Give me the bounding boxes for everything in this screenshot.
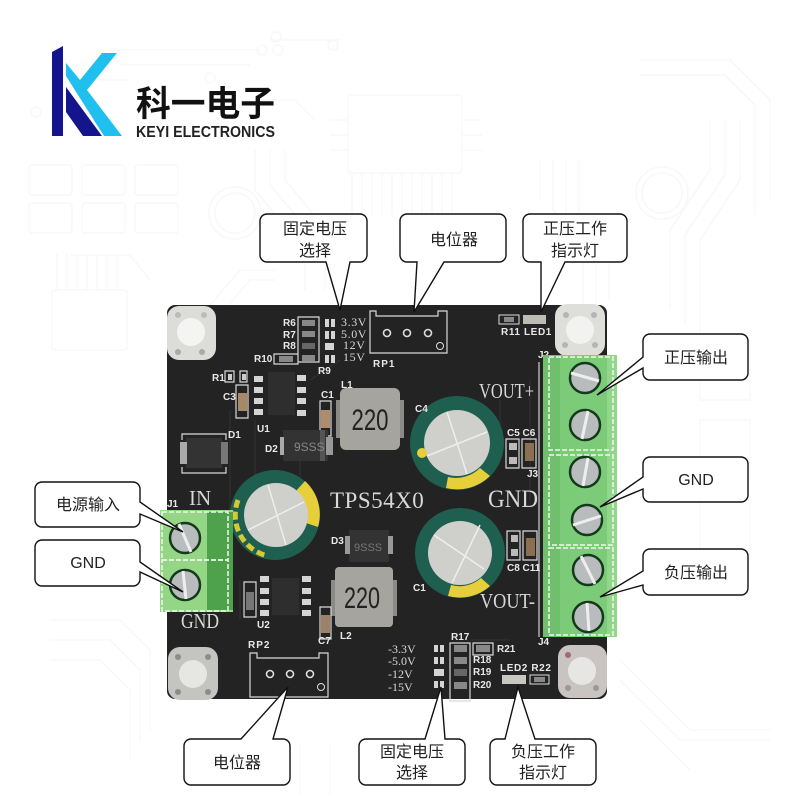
callout: fixed voltage select bottom: 选择: [396, 764, 428, 782]
silk label IN: IN: [189, 486, 211, 510]
silk label VOUT+: VOUT+: [479, 379, 534, 403]
capacitor C7 and C9: C7: [318, 636, 331, 647]
negative voltage selector resistors: R20: [473, 680, 492, 691]
diode D3: D3: [331, 536, 344, 547]
electrolytic capacitor C4: C4: [415, 404, 428, 415]
R1 C3 components: R1: [212, 373, 225, 384]
callout: fixed voltage select top: 选择: [299, 242, 331, 260]
board name: TPS54X0: [330, 488, 424, 513]
inductor L1: L1: [341, 380, 353, 391]
callout: negative output: 负压输出: [664, 564, 728, 582]
diode D1: [180, 430, 241, 473]
LED1 and R11: [499, 315, 552, 338]
callout: negative working indicator: [490, 687, 596, 785]
callout: GND left: [35, 540, 183, 592]
positive voltage labels: 3.3V: [341, 315, 367, 329]
R1 C3 components: [212, 371, 248, 418]
callout: potentiometer top: [400, 214, 506, 312]
positive voltage labels: [341, 315, 367, 364]
connector labels J1 J2 J3 J4: J1: [167, 499, 179, 510]
logo: Keyi Electronics: [52, 46, 275, 141]
negative voltage selector resistors: R21: [497, 644, 516, 655]
diode D2: [265, 430, 333, 461]
positive voltage labels: 12V: [343, 338, 365, 352]
mounting hole bottom right: [558, 645, 607, 698]
callout: positive working indicator: 指示灯: [551, 242, 599, 260]
positive voltage selector resistors: R7: [283, 330, 296, 341]
negative voltage labels: -3.3V: [388, 642, 416, 656]
connector labels J1 J2 J3 J4: J3: [527, 469, 539, 480]
callout: power input: [35, 482, 183, 532]
callout: positive output: [597, 334, 748, 395]
negative voltage selector resistors: R18: [473, 655, 492, 666]
negative voltage selector resistors: R17: [451, 632, 470, 643]
callout: potentiometer bottom: [184, 687, 290, 785]
negative voltage labels: [388, 642, 416, 694]
diode D2: 9SSS: [294, 440, 325, 454]
IC U2: U2: [257, 620, 270, 631]
callout: power input: 电源输入: [56, 496, 120, 514]
connector labels J1 J2 J3 J4: J4: [538, 637, 550, 648]
brand name Chinese: 科一电子: [136, 85, 275, 124]
PCB base: [167, 305, 607, 699]
callout: GND right: GND: [678, 472, 714, 489]
circuit board photo: [160, 304, 617, 701]
electrolytic capacitor C4: [410, 396, 504, 490]
mounting hole top right: [555, 304, 605, 356]
small capacitors C8 C11: [507, 531, 541, 574]
diode D3: [331, 530, 393, 562]
positive voltage selector resistors: R8: [283, 341, 296, 352]
inductor L2: 220: [344, 582, 380, 615]
icon: K mark: [52, 46, 122, 136]
LED2 and R22: [500, 663, 552, 684]
capacitor C7 and C9: [244, 582, 331, 647]
mounting hole bottom left: [168, 647, 218, 700]
callout: negative working indicator: 负压工作: [511, 743, 575, 761]
capacitor C1 small: [320, 390, 334, 436]
screws left: [170, 523, 200, 600]
positive voltage selector resistors: R10: [254, 354, 273, 365]
negative voltage selector resistors: [434, 632, 516, 701]
brand name English: KEYI ELECTRONICS: [136, 124, 275, 141]
silk label VOUT-: VOUT-: [480, 589, 535, 613]
small capacitors C5 C6: C5 C6: [507, 428, 536, 439]
callout: positive working indicator: 正压工作: [543, 220, 607, 238]
diode D2: D2: [265, 444, 278, 455]
electrolytic capacitor left: [230, 470, 320, 560]
callout: potentiometer bottom: 电位器: [213, 754, 261, 772]
electrolytic capacitor C1: [413, 508, 505, 598]
callout: GND left: GND: [70, 555, 106, 572]
potentiometer header RP1: RP1: [373, 359, 395, 370]
silk label GND right: GND: [488, 486, 538, 513]
connector labels J1 J2 J3 J4: J2: [538, 350, 550, 361]
potentiometer header RP2: RP2: [248, 640, 270, 651]
green terminal block right: [539, 355, 617, 637]
callout: fixed voltage select bottom: 固定电压: [380, 743, 444, 761]
callout: positive working indicator: [523, 214, 627, 312]
callout: fixed voltage select top: 固定电压: [283, 220, 347, 238]
IC U2: [257, 576, 311, 631]
callout: fixed voltage select bottom: [359, 687, 465, 785]
negative voltage labels: -5.0V: [388, 654, 416, 668]
callout: positive output: 正压输出: [664, 349, 728, 367]
negative voltage selector resistors: R19: [473, 667, 492, 678]
callout: fixed voltage select top: [260, 214, 367, 310]
positive voltage selector resistors: R9: [318, 366, 331, 377]
positive voltage selector resistors: [254, 317, 335, 377]
negative voltage labels: -12V: [388, 667, 413, 681]
positive voltage selector resistors: R6: [283, 318, 296, 329]
inductor L1: 220: [352, 404, 388, 437]
screws right: [570, 363, 603, 632]
silk label GND left: GND: [181, 609, 219, 633]
electrolytic capacitor C1: C1: [413, 583, 426, 594]
positive voltage labels: 15V: [343, 350, 365, 364]
potentiometer header RP2: [248, 640, 328, 697]
callout: potentiometer top: 电位器: [430, 231, 478, 249]
R1 C3 components: C3: [223, 392, 236, 403]
small capacitors C5 C6: [506, 428, 536, 468]
positive voltage labels: 5.0V: [341, 327, 367, 341]
inductor L2: [331, 567, 397, 642]
callout: negative output: [600, 549, 748, 597]
diode D1: D1: [228, 430, 241, 441]
mounting hole top left: [167, 306, 216, 360]
diode D3: 9SSS: [354, 542, 382, 554]
callout: negative working indicator: 指示灯: [519, 764, 567, 782]
silk traces: [230, 360, 530, 640]
potentiometer header RP1: [370, 311, 447, 370]
connector labels J1 J2 J3 J4: [167, 350, 550, 648]
inductor L1: [336, 380, 404, 450]
green terminal block left: [160, 510, 233, 612]
IC U1: U1: [257, 424, 270, 435]
IC U1: [254, 372, 306, 435]
LED2 and R22: LED2 R22: [500, 663, 552, 674]
LED1 and R11: R11 LED1: [501, 327, 552, 338]
small capacitors C8 C11: C8 C11: [507, 563, 541, 574]
negative voltage labels: -15V: [388, 680, 413, 694]
callout: GND right: [600, 457, 748, 507]
inductor L2: L2: [340, 631, 352, 642]
capacitor C1 small: C1: [321, 390, 334, 401]
